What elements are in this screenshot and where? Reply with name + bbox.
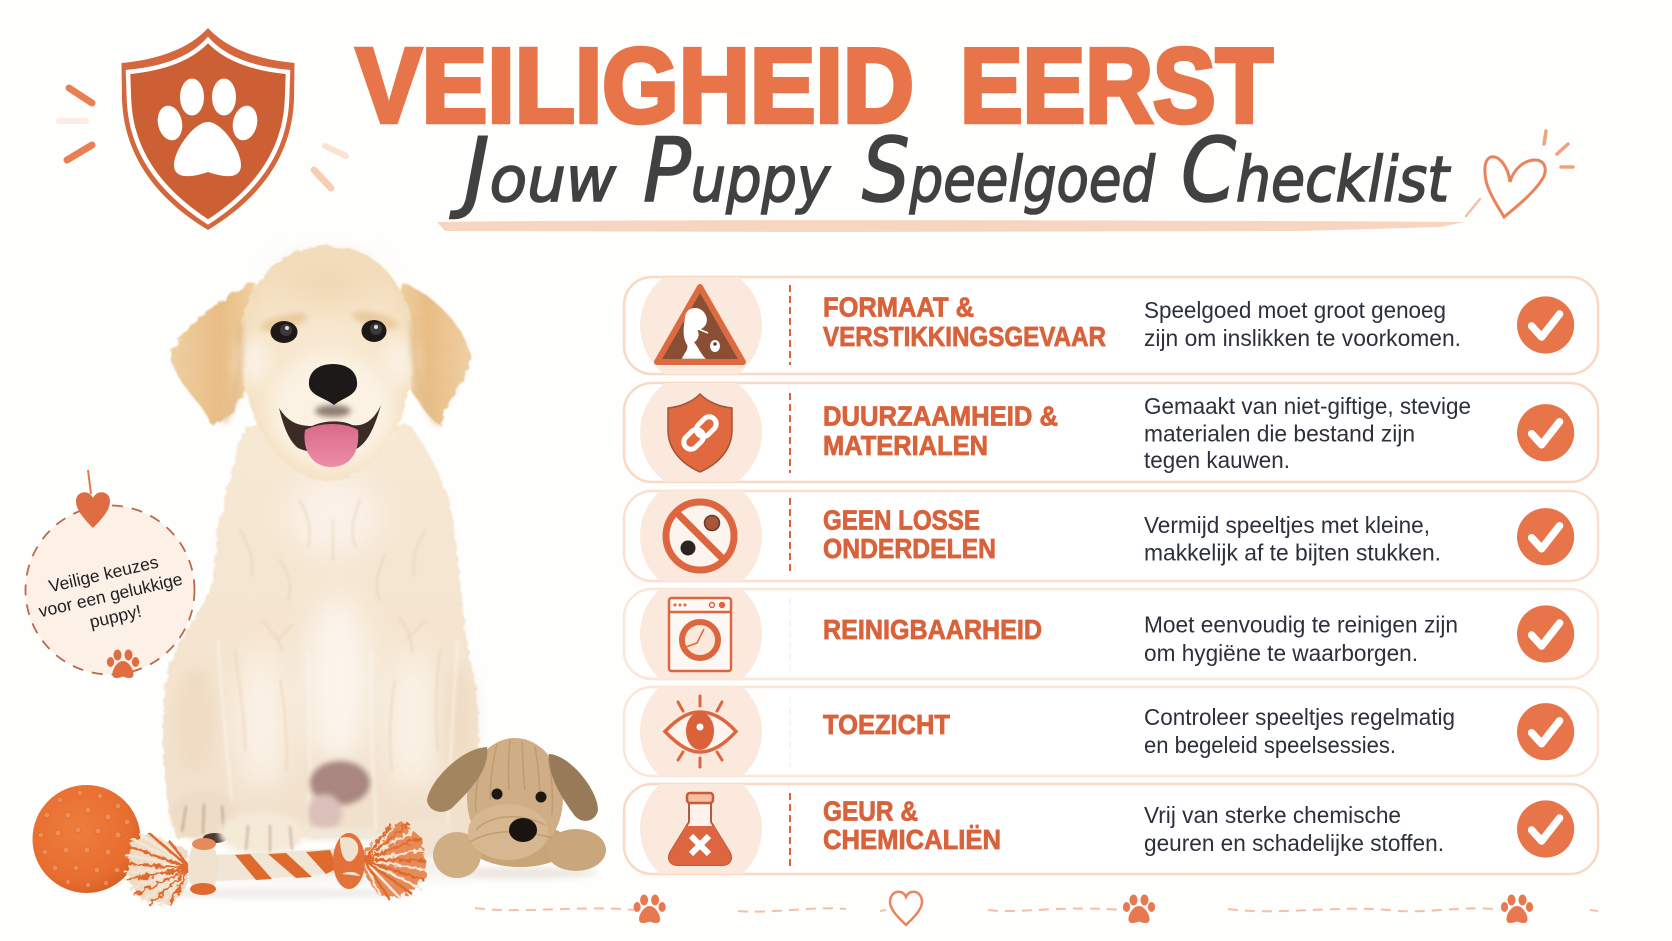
heading: VERSTIKKINGSGEVAAR xyxy=(823,321,1106,352)
description: Speelgoed moet groot genoeg xyxy=(1144,297,1446,323)
row card xyxy=(624,784,1598,874)
icon: prohibited small parts xyxy=(666,502,734,570)
icon disc xyxy=(640,688,762,775)
icon: washing machine xyxy=(669,598,731,671)
description: Vermijd speeltjes met kleine, xyxy=(1144,512,1430,538)
plush face xyxy=(492,788,502,800)
rope tassels xyxy=(125,820,426,906)
leg edges xyxy=(218,640,458,830)
ear fold lines xyxy=(224,320,438,424)
divider xyxy=(789,793,791,866)
check mark xyxy=(1517,296,1574,354)
row card xyxy=(624,277,1598,374)
callout: veilige keuzes xyxy=(26,470,194,678)
icon disc xyxy=(640,277,762,374)
footer paw 1 xyxy=(634,894,666,923)
title xyxy=(356,27,1273,145)
belly shadow xyxy=(310,761,370,805)
row 2: duurzaamheid en materialen xyxy=(622,382,1600,484)
callout text: voor een gelukkige xyxy=(37,569,184,621)
fur strokes xyxy=(235,500,440,770)
footer heart xyxy=(890,892,922,925)
heading: TOEZICHT xyxy=(823,709,950,740)
heading: CHEMICALIËN xyxy=(823,824,1001,855)
icon disc xyxy=(640,491,762,581)
toy: spiky ball xyxy=(32,785,140,893)
description: Vrij van sterke chemische xyxy=(1144,802,1401,828)
logo sparks xyxy=(59,88,346,188)
title: VEILIGHEID xyxy=(356,27,914,145)
heading xyxy=(823,292,1106,352)
callout text: puppy! xyxy=(88,601,143,632)
subtitle: Puppy xyxy=(643,119,831,222)
divider xyxy=(789,498,791,573)
check mark xyxy=(1517,508,1574,565)
description: geuren en schadelijke stoffen. xyxy=(1144,830,1444,856)
description xyxy=(1144,802,1444,856)
heading xyxy=(823,504,996,564)
puppy body silhouette xyxy=(163,425,479,838)
mouth xyxy=(279,405,381,453)
divider xyxy=(789,393,791,473)
description: makkelijk af te bijten stukken. xyxy=(1144,540,1441,566)
plush head xyxy=(467,738,563,858)
check mark xyxy=(1517,703,1574,760)
icon: hand drawn heart xyxy=(1466,131,1573,217)
muzzle shadow xyxy=(315,405,351,417)
footer decoration xyxy=(475,892,1598,925)
brush underline xyxy=(437,220,1465,232)
heading: REINIGBAARHEID xyxy=(823,614,1042,645)
row card xyxy=(624,687,1598,776)
check mark xyxy=(1517,404,1574,461)
row 6: geur en chemicalien xyxy=(622,782,1600,876)
description: materialen die bestand zijn xyxy=(1144,421,1415,447)
rope body xyxy=(214,848,340,881)
heading: FORMAAT & xyxy=(823,292,974,323)
callout text xyxy=(32,547,189,643)
puppy head xyxy=(224,246,438,480)
subtitle xyxy=(449,119,1451,222)
icon disc xyxy=(640,784,762,874)
plush ears xyxy=(427,747,487,812)
heading: MATERIALEN xyxy=(823,430,988,461)
heading: GEEN LOSSE xyxy=(823,504,980,535)
description: Moet eenvoudig te reinigen zijn xyxy=(1144,612,1458,638)
row 4: reinigbaarheid xyxy=(622,588,1600,680)
tongue xyxy=(304,424,358,467)
icon: flask with cross xyxy=(669,793,731,865)
description: om hygiëne te waarborgen. xyxy=(1144,640,1418,666)
hind paw xyxy=(171,790,237,843)
subtitle: Speelgoed xyxy=(862,119,1156,222)
icon disc xyxy=(640,383,762,482)
heading: GEUR & xyxy=(823,796,918,827)
row card xyxy=(624,589,1598,679)
description: Gemaakt van niet-giftige, stevige xyxy=(1144,393,1471,419)
description: zijn om inslikken te voorkomen. xyxy=(1144,325,1461,351)
heading xyxy=(823,401,1058,461)
icon: eye xyxy=(665,696,736,767)
puppy ears xyxy=(170,282,471,426)
row card xyxy=(624,491,1598,581)
plush body xyxy=(470,823,570,867)
front paw xyxy=(219,812,305,854)
heading xyxy=(823,796,1001,855)
divider xyxy=(789,285,791,365)
puppy xyxy=(163,246,480,877)
callout paw xyxy=(107,650,139,678)
rope knots xyxy=(188,833,365,895)
description xyxy=(1144,297,1461,351)
eyes xyxy=(270,321,298,343)
row 1: formaat en verstikkingsgevaar xyxy=(622,276,1600,376)
icon: shield with chain link xyxy=(668,394,732,472)
description xyxy=(1144,612,1458,666)
icon disc xyxy=(640,590,762,678)
toy: rope xyxy=(125,820,426,906)
divider xyxy=(789,598,791,672)
description: en begeleid speelsessies. xyxy=(1144,732,1396,758)
check mark xyxy=(1517,605,1574,663)
divider xyxy=(789,697,791,767)
callout heart xyxy=(76,470,110,528)
description: tegen kauwen. xyxy=(1144,447,1290,473)
row card xyxy=(624,383,1598,482)
description: Controleer speeltjes regelmatig xyxy=(1144,704,1455,730)
icon: choking hazard triangle xyxy=(657,287,743,362)
callout text: Veilige keuzes xyxy=(47,552,161,596)
description xyxy=(1144,704,1455,758)
footer paw 2 xyxy=(1123,894,1155,923)
check mark xyxy=(1517,800,1574,858)
description xyxy=(1144,512,1441,566)
logo: shield with paw xyxy=(122,28,294,230)
ground shadow xyxy=(180,859,480,877)
title: EERST xyxy=(960,27,1273,145)
nose xyxy=(309,364,357,405)
description xyxy=(1144,393,1471,473)
heading: DUURZAAMHEID & xyxy=(823,401,1058,432)
subtitle: Checklist xyxy=(1181,119,1451,222)
subtitle: Jouw xyxy=(449,119,616,222)
heading: ONDERDELEN xyxy=(823,533,996,564)
row 3: geen losse onderdelen xyxy=(622,490,1600,582)
footer paw 3 xyxy=(1501,894,1533,923)
row 5: toezicht xyxy=(622,686,1600,778)
toy: plush dog xyxy=(427,738,606,879)
